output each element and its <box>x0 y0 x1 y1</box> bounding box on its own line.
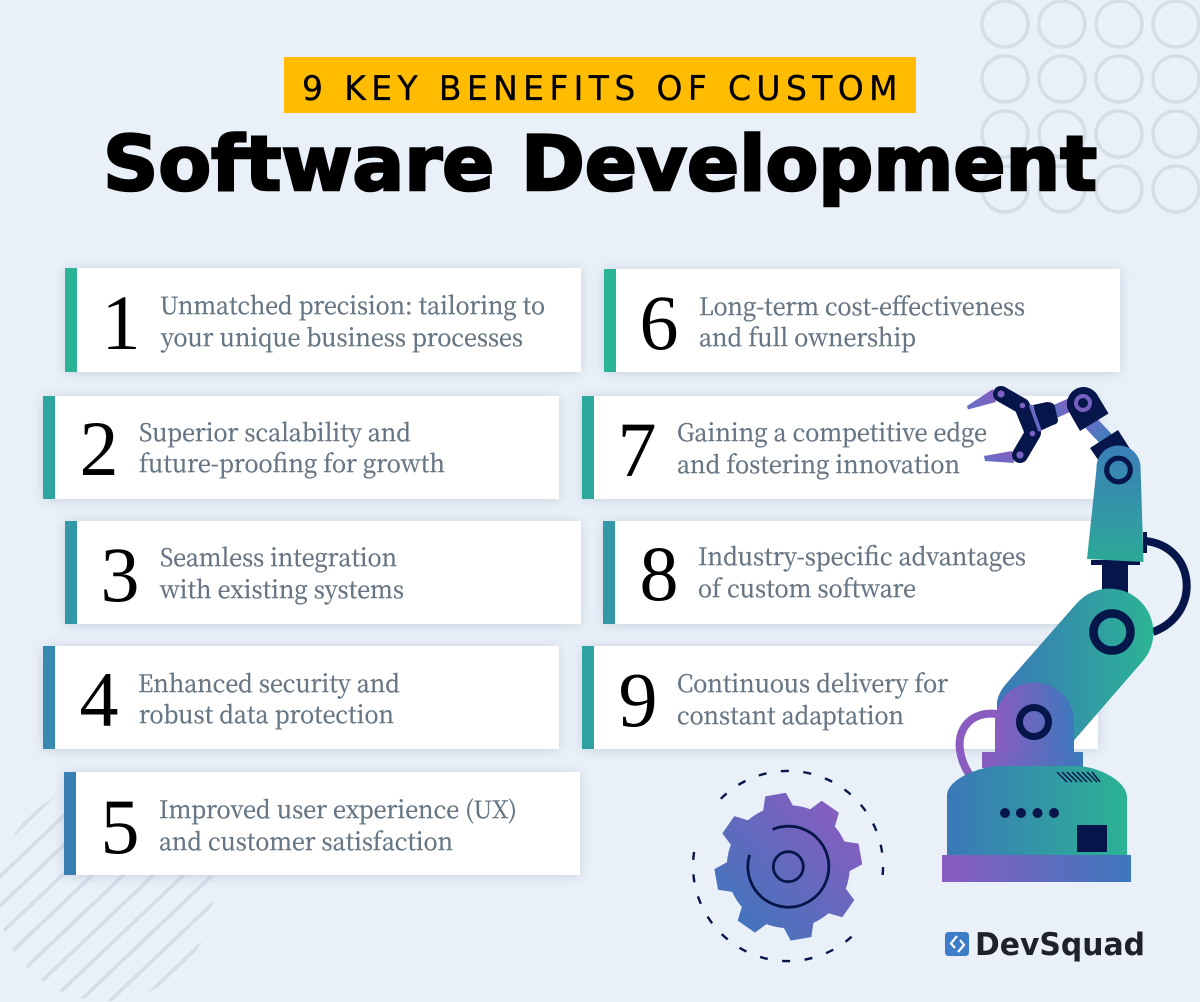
robot head <box>982 682 1083 768</box>
card 5 <box>64 772 580 875</box>
card 1 <box>65 268 581 372</box>
card 6: Long-term cost-effectiveness <box>699 287 1025 322</box>
robot claw <box>967 389 1072 463</box>
card 3: with existing systems <box>159 570 404 605</box>
card 9 <box>582 646 1098 749</box>
card 8: 8 <box>640 530 678 617</box>
card 9: Continuous delivery for <box>677 664 948 699</box>
card 2: future-proofing for growth <box>139 444 445 479</box>
robot connector <box>1143 532 1147 553</box>
robot neck <box>1091 560 1140 598</box>
logo: DevSquad <box>945 927 1145 963</box>
card 8: of custom software <box>698 569 916 604</box>
card 7: 7 <box>618 406 656 493</box>
logo wordmark: DevSquad <box>975 927 1145 963</box>
card 5: 5 <box>100 783 140 870</box>
card 9: constant adaptation <box>677 696 904 731</box>
card 2: 2 <box>80 405 118 492</box>
card 7 <box>582 396 1098 499</box>
card 2 <box>43 396 559 499</box>
icon: gear <box>693 771 883 961</box>
card 6 <box>604 269 1120 372</box>
card 1: your unique business processes <box>160 318 523 353</box>
card 1: 1 <box>102 279 140 366</box>
robot purple cable <box>960 714 997 774</box>
card 1: Unmatched precision: tailoring to <box>160 286 545 321</box>
robot foot <box>942 855 1131 882</box>
card 6: 6 <box>640 279 678 366</box>
card 5: and customer satisfaction <box>159 822 453 857</box>
card 9: 9 <box>618 656 658 743</box>
title banner <box>284 57 916 113</box>
card 8 <box>603 521 1119 624</box>
robot cable <box>1145 541 1187 632</box>
card 7: and fostering innovation <box>677 445 960 480</box>
card 4: Enhanced security and <box>138 664 400 699</box>
card 4 <box>43 646 559 749</box>
card 3: 3 <box>100 531 140 618</box>
logo icon <box>945 932 969 956</box>
card 5: Improved user experience (UX) <box>159 790 517 825</box>
title banner: 9 KEY BENEFITS OF CUSTOM <box>302 69 898 108</box>
card 7: Gaining a competitive edge <box>677 413 987 448</box>
robot base body <box>947 766 1127 856</box>
title: Software Development <box>103 119 1097 208</box>
card 2: Superior scalability and <box>139 413 411 448</box>
card 8: Industry-specific advantages <box>698 537 1026 572</box>
robot wrist <box>1067 387 1132 467</box>
icon: robot arm <box>942 387 1187 882</box>
card 3 <box>65 521 581 624</box>
card 6: and full ownership <box>699 318 916 353</box>
robot lower arm <box>997 589 1153 745</box>
robot upper arm <box>1087 445 1144 562</box>
card 4: 4 <box>80 656 118 743</box>
card 4: robust data protection <box>139 695 394 730</box>
card 3: Seamless integration <box>160 538 397 573</box>
